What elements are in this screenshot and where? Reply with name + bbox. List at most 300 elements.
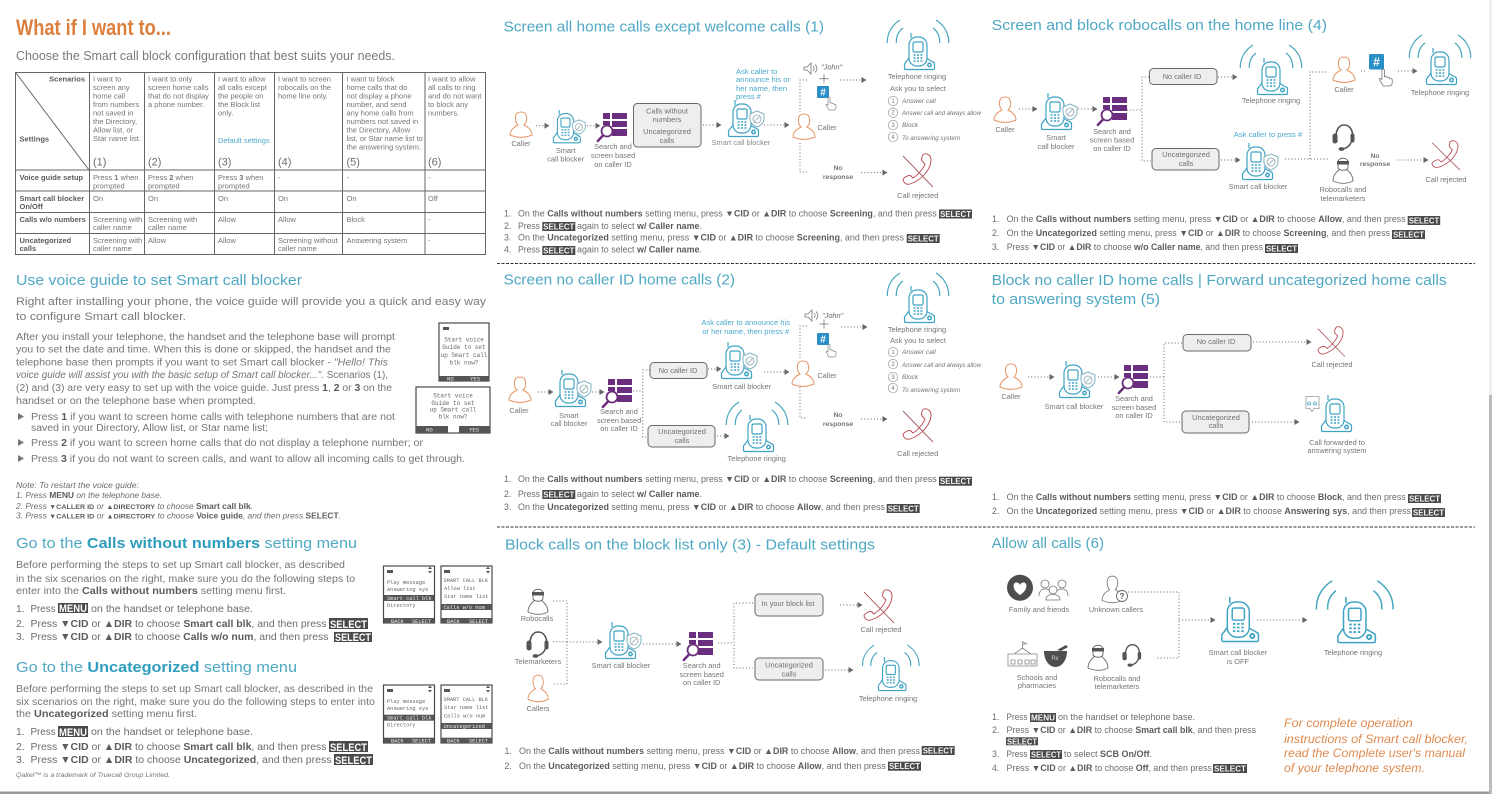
arrow [1028,376,1050,378]
steps: SELECT [543,490,574,500]
icon: smart call blocker: Smart [556,146,576,155]
icon: smart call blocker: call blocker [1038,142,1075,151]
LCD: calls w/o num: Star name list [444,594,489,600]
bullet list: Press 3 if you do not want to screen calls, and want to allow all incoming calls to get through. [31,454,465,465]
steps: 1. [16,604,25,615]
note: 2. Press ▼CALLER ID or ▲DIRECTORY to choose Smart call blk . [15,502,253,511]
settings table: - [428,215,431,224]
panel: what if I want to [16,15,486,254]
icon: smart call blocker: call blocker [547,154,585,164]
paragraph: Before performing the steps to set up Smart call blocker, as described [16,560,345,571]
settings table: the Block list [218,100,261,109]
icon: telemarketers [515,632,562,666]
steps: on the handset or telephone base. [91,727,253,738]
icon: voice and hash key [805,310,844,357]
icon: robocalls and telemarketers: Robocalls and [1320,185,1366,194]
steps: Press [518,489,541,499]
steps: SELECT [330,742,367,754]
settings table: and do not want [428,92,482,100]
icon: voice and hash key: "John" [822,311,844,320]
steps: SELECT [543,222,574,232]
steps [992,712,1257,774]
body text: After you install your telephone, the handset and the telephone base will prompt [16,332,395,343]
lead text [16,296,487,323]
steps: Press [1006,712,1028,722]
arrow [1019,108,1033,110]
steps: MENU [1031,714,1055,722]
heading: Block calls on the block list only (3) - Default settings [505,536,875,553]
icon: telephone ringing [887,20,949,81]
steps [504,209,972,256]
box: uncategorized calls: Uncategorized [658,427,706,436]
settings table: only. [218,108,233,118]
settings table: I want to [93,74,121,84]
LCD: start voice guide with battery: Guide to set [442,344,486,351]
arrow [592,391,600,393]
steps: On the Uncategorized setting menu, press ▼CID or ▲DIR to choose Screening, and then press [518,233,905,243]
settings table: not display a phone [346,92,412,100]
paragraph: in the six scenarios on the right, make sure you do the following steps to [16,574,355,585]
steps: again to select w/ Caller name. [577,245,702,255]
arrow [840,79,862,81]
box: in your block list: In your block list [762,599,814,608]
icon: smart call blocker [547,110,585,164]
callout: complete manual [1284,718,1468,775]
options list: Block [902,122,919,129]
steps [992,492,1445,518]
arrow [708,368,717,370]
icon: search and screen: screen based [1112,403,1156,412]
LCD: start voice guide prompt: blk now? [439,413,468,420]
arrow [840,604,858,606]
short dotted connector [1361,70,1367,72]
bullet list: saved in your Directory, Allow list, or Star name list; [31,423,268,434]
icon: search and screen: on caller ID [594,160,632,169]
settings table: On [218,194,228,203]
LCD: calls w/o num: SMART CALL BLK [444,578,489,584]
steps: SELECT [1413,508,1444,518]
icon: hash key: # [1373,55,1380,69]
settings table: calls [20,244,36,253]
icon: smart call blocker with prompt: Ask caller to [736,67,777,76]
settings table: I want to allow [428,74,476,84]
arrow [1179,619,1211,621]
steps: SELECT [543,246,574,256]
icon: search and screen [591,113,635,169]
arrow [703,124,717,126]
icon: smart call blocker with prompt [701,318,790,391]
settings table: list, or Star name list to [346,134,423,143]
body text: handset or on the telephone base when prompted. [16,396,256,407]
LCD: calls w/o num: Allow list [444,586,476,592]
note: 3. Press ▼CALLER ID or ▲DIRECTORY to choose Voice guide , and then press SELECT. [16,512,341,520]
LCD: main menu: Directory [387,603,416,609]
options list: 1 [891,350,895,356]
steps: Press ▼CID or ▲DIR to choose Off, and then press [1006,763,1213,773]
box: uncategorized calls: Uncategorized [1192,413,1240,422]
no response label: response [1360,161,1390,168]
settings table: prompted [148,182,180,190]
icon: robocalls and telemarketers [1088,645,1141,691]
title: What if I want to... [16,15,171,40]
box: no caller ID [1183,334,1251,351]
icon: smart call blocker [592,622,651,670]
heading: Screen all home calls except welcome calls (1) [504,18,824,36]
box: uncategorized calls [648,426,715,447]
arrow [643,643,677,645]
box: uncategorized calls: Uncategorized [1162,150,1210,159]
steps: 2. [16,742,25,753]
settings table: I want to block [346,74,395,84]
callout: complete manual: instructions of Smart call blocker, [1284,734,1468,746]
settings table: that do not display [148,92,209,100]
LCD: start voice guide prompt: NO [426,426,433,434]
steps: 1. [992,492,999,502]
settings table: (2) [148,156,161,168]
icon: robocalls [521,589,554,623]
icon: search and screen: Search and [600,407,638,416]
LCD: uncategorized [441,685,492,744]
icon: smart call blocker off [1209,597,1268,666]
icon: search and screen: on caller ID [683,678,720,687]
steps: 2. [992,228,999,238]
LCD: start voice guide prompt: Start voice [433,393,473,400]
steps: SELECT [888,504,919,514]
arrow [587,125,596,127]
steps: on the handset or telephone base. [1058,712,1195,722]
steps [16,726,373,767]
settings table: number, and send [346,100,407,109]
icon: telephone ringing: Telephone ringing [1411,88,1469,97]
settings table: On [148,194,158,203]
steps: SELECT [908,234,939,244]
settings table: not saved in [93,108,133,118]
steps: 1. [992,712,999,722]
LCD: main menu: BACK [391,738,405,744]
LCD: uncategorized: BACK [447,738,461,744]
box: no caller ID: No caller ID [1163,72,1201,81]
panel: scenario 1 [504,18,982,256]
box: call categories: Calls without [646,106,688,116]
steps: On the Uncategorized setting menu, press ▼CID or ▲DIR to choose Allow, and then press [518,502,886,512]
settings table: from numbers [93,100,140,109]
panel: scenario 2 [504,271,982,514]
LCD: start voice guide with battery: Start voice [444,336,484,344]
heading [992,272,1447,308]
icon: telephone ringing uncategorized [726,402,788,463]
panel: calls without numbers menu [16,535,492,644]
settings table: Screening without [278,236,339,245]
heading: Use voice guide to set Smart call blocker [16,272,302,289]
steps: Press [518,221,541,231]
paragraph: the Uncategorized setting menu first. [16,709,197,720]
icon: caller: Caller [511,139,531,148]
icon: telephone ringing: Telephone ringing [1242,96,1300,105]
icon: unknown callers: ? [1120,592,1125,601]
LCD: uncategorized: Calls w/o num [444,713,485,719]
arrow [1218,76,1233,78]
settings table: the people on [218,92,263,100]
heading: Screen no caller ID home calls (2) [504,271,735,288]
steps: Press ▼CID or ▲DIR to choose Smart call blk, and then press [30,742,326,753]
steps: 3. [16,755,25,766]
no response label: No [1370,153,1380,160]
icon: voice and hash key: # [820,88,826,98]
paragraph: enter into the Calls without numbers setting menu first. [16,586,286,597]
box: call categories [634,104,701,147]
LCD: main menu: SELECT [412,738,431,744]
icon: answering system [1306,395,1367,455]
icon: smart call blocker: Smart [1046,133,1066,142]
icon: telephone ringing [1316,581,1393,657]
box: uncategorized calls: calls [1179,159,1194,168]
steps: 1. [992,214,999,224]
steps: 3. [16,632,25,643]
LCD: main menu: BACK [391,619,405,625]
steps: SELECT [335,755,372,767]
box: no caller ID: No caller ID [1197,337,1235,346]
settings table: Smart call blocker [20,194,84,203]
arrow [536,125,545,127]
box: uncategorized calls: calls [1209,421,1224,430]
LCD: main menu [384,566,434,625]
steps: SELECT [1409,494,1440,504]
steps: Press ▼CID or ▲DIR to choose Smart call blk, and then press [1006,725,1257,735]
settings table: (4) [278,156,291,168]
settings table: Press 1 when [93,173,138,182]
box: no caller ID: No caller ID [659,366,697,375]
branch lines [800,80,807,172]
no response label: No [833,412,843,419]
steps: On the Calls without numbers setting menu, press ▼CID or ▲DIR to choose Block, and then press [1007,492,1406,502]
icon: smart call blocker: Smart call blocker [592,661,651,670]
steps: SELECT [1214,764,1246,774]
icon: search and screen [680,632,724,687]
icon: robocalls and telemarketers [1320,125,1366,203]
bullet list: Press 2 if you want to screen home calls that do not display a telephone number; or [31,438,424,449]
icon: telephone ringing: Telephone ringing [859,694,917,703]
steps: Press [30,604,56,615]
LCD: start voice guide prompt: Guide to set [431,400,475,407]
paragraph: Before performing the steps to set up Smart call blocker, as described in the [16,684,373,695]
icon: call rejected: Call rejected [1425,175,1467,184]
body text [16,332,395,407]
callout: complete manual: of your telephone system. [1284,763,1425,775]
icon: answering system: Call forwarded to [1309,438,1365,447]
panel: scenario 6 [992,535,1468,775]
icon: caller announces: Caller [817,371,837,380]
steps: On the Uncategorized setting menu, press ▼CID or ▲DIR to choose Allow, and then press [519,761,886,771]
icon: smart call blocker with prompt: Smart call blocker [712,382,772,391]
LCD: uncategorized: Uncategorized [444,724,485,730]
note: 1. Press MENU on the telephone base. [16,491,162,500]
settings table: to block any [428,100,468,109]
box: uncategorized calls [1182,411,1249,433]
bullet list [18,412,465,465]
settings table: home calls that do [346,83,407,92]
branch lines [633,370,650,437]
steps: MENU [59,727,87,739]
icon: telephone ringing: Telephone ringing [888,325,946,334]
icon: caller announces [792,361,837,386]
settings table: Allow list, or [93,126,134,134]
lead text: Right after installing your phone, the voice guide will provide you a quick and easy way [16,296,487,308]
options list: Answer call and always allow [901,110,982,117]
branch lines [718,603,753,668]
settings table: (5) [346,156,360,168]
branch lines [1285,72,1328,159]
settings table: prompted [93,182,125,190]
steps: SELECT [1393,230,1424,240]
icon: robocalls and telemarketers: Robocalls and [1094,674,1140,683]
icon: caller announces: Caller [817,123,837,132]
icon: search and screen: Search and [594,142,632,151]
steps: SELECT [335,632,371,644]
panel: uncategorized menu [16,659,492,779]
icon: search and screen: Search and [1115,394,1153,403]
icon: unknown callers: Unknown callers [1089,605,1143,614]
steps: 2. [504,221,511,231]
LCD: uncategorized: Star name list [444,705,489,711]
LCD: start voice guide with battery: NO [447,376,454,382]
icon: call rejected [1311,327,1353,369]
steps [992,214,1440,254]
trademark note: Qaltel™ is a trademark of Truecall Group Limited. [16,772,170,779]
steps: 1. [504,474,511,484]
icon: smart call blocker [1045,361,1104,411]
steps: SELECT [940,477,971,486]
icon: call rejected: Call rejected [897,191,938,200]
steps: SELECT [1266,244,1297,254]
options list: 1 [891,99,895,105]
branch lines [1150,343,1182,422]
paragraph: six scenarios on the right, make sure you do the following steps to enter into [16,697,375,708]
steps [16,603,372,644]
note: Note: To restart the voice guide: [16,481,139,490]
steps: 3. [992,242,999,252]
icon: call rejected: Call rejected [860,625,902,634]
settings table: home line only. [278,92,328,100]
icon: search and screen: screen based [597,416,641,425]
options list: Block [902,374,919,381]
steps: 1. [504,209,511,219]
icon: search and screen [1112,365,1156,420]
steps: SELECT [940,210,971,219]
arrow [764,124,785,126]
note [15,481,341,520]
branch lines [1127,77,1151,161]
steps: 3. [504,502,511,512]
settings table: I want to only [148,74,192,84]
icon: smart call blocker: Smart call blocker [1045,402,1104,411]
LCD: start voice guide with battery: blk now? [450,360,479,366]
panel: scenario 4 [992,17,1471,254]
settings table: Screening with [148,215,197,224]
icon: smart call blocker off: is OFF [1227,657,1250,666]
icon: search and screen: Search and [683,661,721,670]
settings table: Answering system [346,236,407,245]
icon: smart call blocker [1038,93,1077,151]
settings table: all calls except [218,83,268,92]
icon: voice and hash key [804,62,843,110]
body text: voice guide will assist you with the basic setup of Smart call blocker...". Scenarios (1), [16,370,388,381]
settings table: a phone number. [148,100,204,109]
heading: Go to the Uncategorized setting menu [16,659,297,676]
options list: 3 [891,375,895,381]
steps: 2. [992,725,999,735]
icon: unknown callers [1089,576,1143,614]
settings table: Allow [218,236,237,245]
steps: to select SCB On/Off. [1064,749,1152,759]
steps: On the Calls without numbers setting menu, press ▼CID or ▲DIR to choose Screening, and then press [518,474,937,484]
settings table: Block [346,215,365,224]
icon: callers: Callers [526,704,550,713]
icon: schools and pharmacies [1008,642,1068,690]
icon: search and screen: screen based [591,151,635,160]
steps: Press [30,727,56,738]
callout: complete manual: For complete operation [1284,718,1413,730]
body text: (2) and (3) are very easy to set up with the voice guide. Just press 1, 2 or 3 on the [16,383,392,394]
branch lines [1128,592,1179,658]
settings table: numbers. [428,108,459,118]
box: uncategorized calls [1152,148,1219,170]
steps: 2. [504,761,512,771]
icon: smart call blocker with prompt: announce his or [736,75,791,84]
steps: 3. [992,749,999,759]
icon: caller: Caller [509,406,529,415]
options list: To answering system [902,135,960,142]
settings table: Scenarios [49,74,85,84]
box: uncategorized calls: Uncategorized [765,660,813,670]
LCD: start voice guide with battery: YES [470,376,481,382]
settings table: home call [93,92,125,100]
settings table: Settings [20,134,49,144]
callout: complete manual: read the Complete user's manual [1284,748,1465,760]
icon: telephone ringing: Telephone ringing [1324,648,1382,657]
settings table: On [278,194,288,203]
LCD: start voice guide prompt: YES [469,426,480,434]
steps: on the handset or telephone base. [91,604,253,615]
icon: caller [510,112,532,148]
icon: search and screen: on caller ID [600,424,638,433]
LCD: main menu: SELECT [412,619,431,625]
icon: smart call blocker: Smart call blocker [1229,182,1288,191]
arrow [1252,421,1295,423]
icon: telephone ringing [859,645,919,703]
box: call categories: calls [660,136,675,145]
no response label: No [833,165,843,172]
arrow [717,435,725,437]
steps: 1. [504,746,512,756]
icon: call rejected [1425,141,1467,184]
LCD: main menu: Answering sys [387,587,428,593]
settings table: numbers not saved in [346,117,418,126]
icon: smart call blocker: call blocker [551,419,588,428]
icon: telephone ringing [1409,35,1471,97]
arrow [841,326,863,328]
branch lines [553,601,567,684]
icon: robocalls and telemarketers: telemarketers [1321,194,1366,203]
LCD: start voice guide with battery [439,323,489,382]
settings table: Allow [278,215,297,224]
steps: 2. [16,619,25,630]
icon: smart call blocker off: Smart call blocker [1209,648,1268,657]
arrow [1078,108,1093,110]
steps: 3. [504,233,511,243]
steps: On the Calls without numbers setting menu, press ▼CID or ▲DIR to choose Allow, and then press [1007,214,1406,224]
steps: SELECT [889,762,920,771]
settings table: Allow [218,215,237,224]
